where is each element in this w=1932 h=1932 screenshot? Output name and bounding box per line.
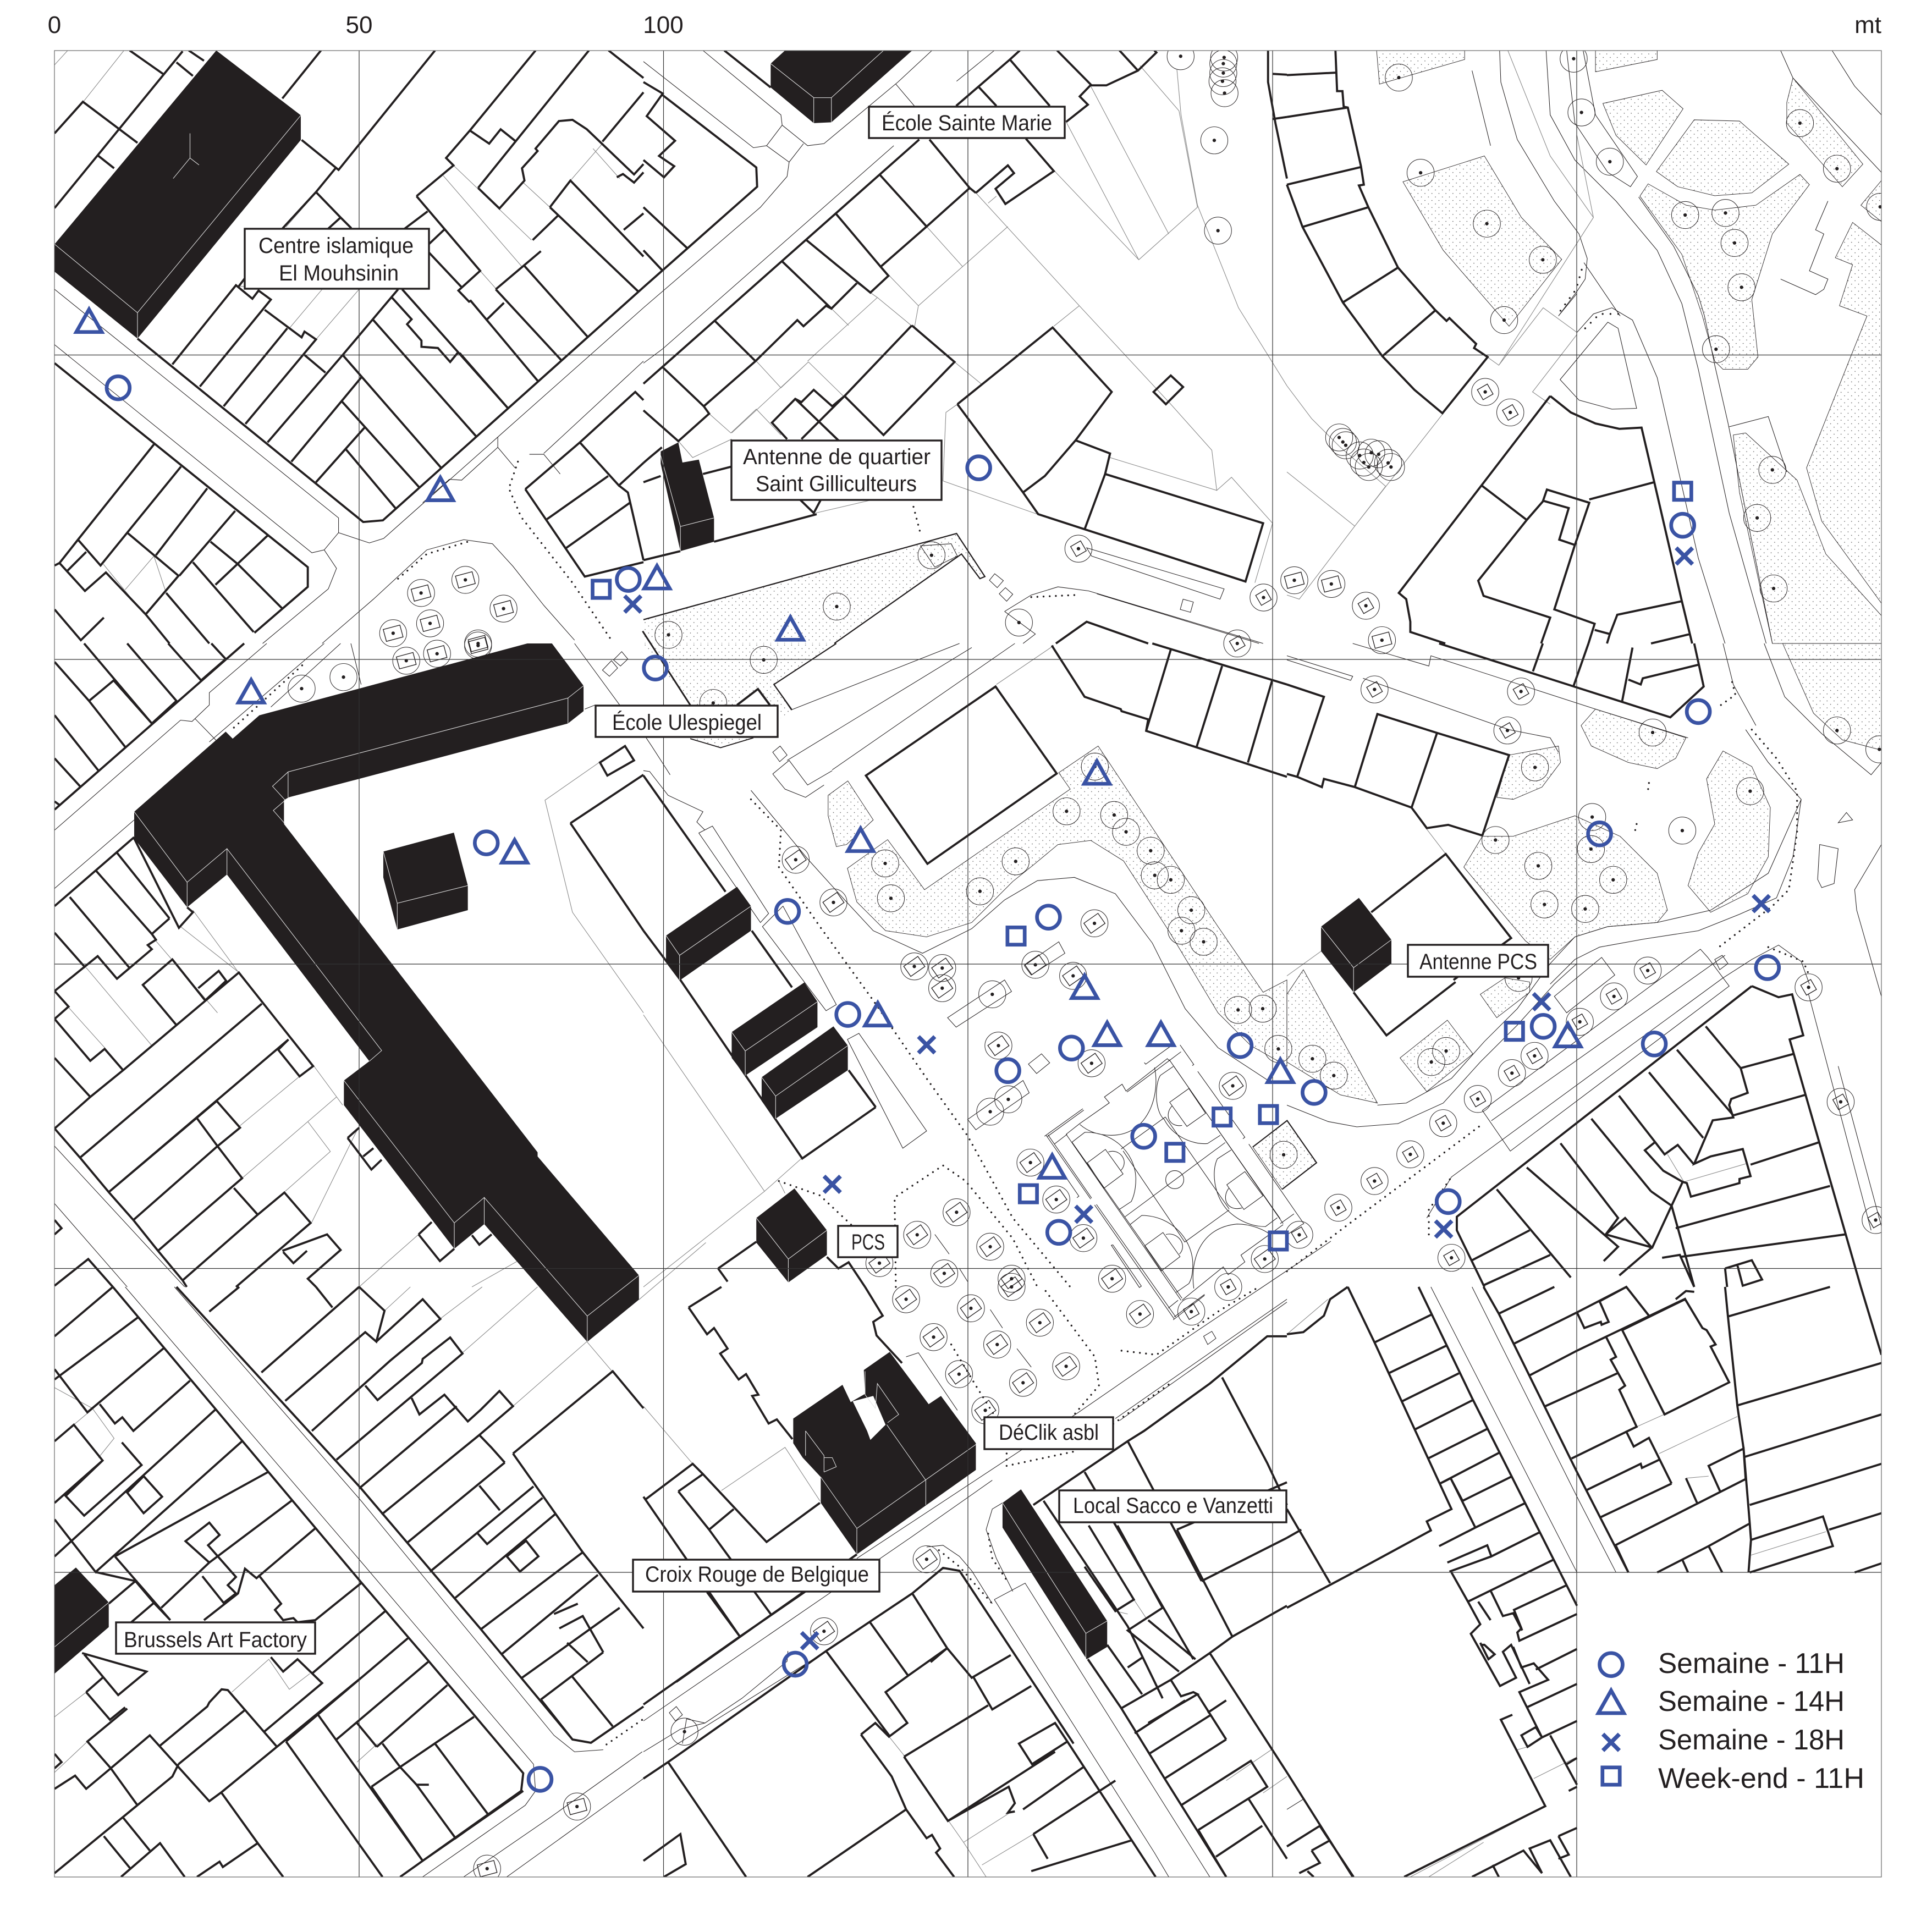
thin parcel lines: [678, 65, 1287, 583]
label: Local Sacco e Vanzetti: Local Sacco e Vanzetti: [1073, 1494, 1273, 1518]
legend text: [1658, 1648, 1864, 1795]
dotted edges: [1287, 678, 1809, 1272]
label: Local Sacco e Vanzetti: [1059, 1490, 1286, 1522]
trees: [1286, 676, 1893, 1272]
trees: [700, 646, 1297, 1292]
scale axis labels: 50: [346, 12, 372, 38]
map sector: north-west: [54, 51, 643, 657]
map sector: west: [54, 632, 706, 1342]
dotted edge: [607, 1719, 643, 1744]
label: Croix Rouge de Belgique: [633, 1560, 879, 1592]
thin lines: promenade and rectangles: [643, 643, 1272, 1281]
markers: south-west: [529, 1768, 552, 1791]
label: Brussels Art Factory: Brussels Art Factory: [124, 1628, 307, 1652]
trees: [288, 632, 492, 702]
court walls: [1044, 1045, 1304, 1320]
thin parcel lines: [643, 646, 1054, 1287]
label: Antenne de quartier Saint Gilliculteurs: Antenne de quartier: [743, 445, 931, 469]
building outlines: [54, 1287, 643, 1877]
roof line: [54, 1603, 109, 1647]
label: DéClik asbl: DéClik asbl: [999, 1421, 1099, 1445]
thin lines: [643, 1241, 1331, 1877]
markers: east: [1302, 700, 1779, 1237]
thin parcel lines: [1287, 1299, 1826, 1877]
thin parcel lines: [54, 1287, 643, 1773]
scale axis labels: [48, 12, 1881, 38]
thin road curves: [1287, 643, 1881, 1230]
scale axis labels: 100: [643, 12, 684, 38]
legend symbols: [1598, 1653, 1624, 1785]
markers: south-centre: [784, 1632, 818, 1676]
label: École Sainte Marie: École Sainte Marie: [882, 111, 1052, 135]
label: Antenne de quartier Saint Gilliculteurs: Saint Gilliculteurs: [756, 472, 917, 496]
trees: [474, 1793, 591, 1883]
building outlines: [643, 51, 1287, 643]
black L-shaped building: École Ulespiegel: [134, 643, 639, 1342]
thin parcel lines: [54, 51, 620, 614]
black buildings: école Sainte Marie side and antenne: [660, 51, 912, 551]
label: Antenne PCS: Antenne PCS: [1419, 950, 1537, 974]
court lines: [1121, 1117, 1229, 1242]
roof lines: [1321, 927, 1391, 992]
legend text: Semaine - 18H: [1658, 1724, 1845, 1756]
dotted edges: [234, 664, 304, 728]
scale axis labels: 0: [48, 12, 61, 38]
stippled planters: [1287, 643, 1881, 1103]
label: Antenne PCS: [1408, 945, 1548, 977]
north planter continuation: [643, 643, 836, 747]
courtyard notch: [853, 1396, 885, 1440]
map sector: south-west: [54, 1287, 643, 1883]
label: PCS: [838, 1226, 898, 1257]
label: PCS: PCS: [851, 1230, 885, 1254]
label: Croix Rouge de Belgique: Croix Rouge de Belgique: [645, 1562, 869, 1587]
map sector: north-east: [1281, 45, 1894, 654]
central sports court: [1044, 1045, 1317, 1320]
buildings outlines: [1287, 51, 1692, 643]
label: École Ulespiegel: [596, 706, 778, 737]
dotted edges: [939, 1287, 1259, 1604]
map sector: centre park: [643, 631, 1317, 1292]
thin parcel lines: [1287, 828, 1746, 1182]
thin lines: [1287, 1287, 1616, 1809]
planter outline: [643, 533, 985, 643]
building outlines: [643, 643, 1287, 1287]
roof lines: [666, 906, 848, 1283]
black building: Brussels Art Factory: [54, 1567, 109, 1674]
legend: [1598, 1648, 1864, 1795]
scale axis labels: mt: [1854, 12, 1881, 38]
arc below label: [690, 738, 753, 748]
thin street curves: [1472, 51, 1881, 643]
markers: west: [239, 680, 527, 862]
legend text: Semaine - 14H: [1658, 1686, 1845, 1718]
dotted edges: [913, 507, 1075, 597]
building outlines: [54, 643, 643, 1287]
stippled planters: [828, 746, 1317, 1189]
park ground and thin lines: [54, 289, 643, 643]
trees: [671, 1273, 1242, 1745]
trees: [655, 43, 1277, 657]
thin lines: [54, 643, 628, 1287]
map sector: south-centre: [643, 1241, 1331, 1877]
markers: north-east: [1671, 483, 1694, 564]
label: Centre islamique El Mouhsinin: [245, 229, 429, 289]
thin parcel lines: [643, 1406, 1287, 1877]
black building: Antenne PCS: [1321, 898, 1391, 992]
label: Centre islamique El Mouhsinin: El Mouhsinin: [279, 261, 399, 285]
map sector: north-centre: [643, 43, 1287, 657]
observation markers: [76, 310, 1779, 1791]
black building: Centre islamique: [54, 51, 301, 339]
stippled planters: [1377, 51, 1881, 643]
markers: north-centre: [644, 456, 990, 640]
planter double edge: [1253, 1120, 1317, 1189]
roof lines: [660, 51, 884, 551]
dotted promenade lines: [751, 800, 1070, 1287]
legend text: Week-end - 11H: [1658, 1763, 1864, 1795]
markers: north-west: [76, 310, 641, 612]
building block outlines: [54, 51, 643, 643]
building roof lines: [54, 115, 301, 339]
black cube building: [383, 833, 468, 929]
court kiosks: [1087, 1088, 1263, 1271]
north planter edges: [643, 631, 690, 705]
roof lines: [134, 686, 639, 1342]
dotted park edges: [398, 461, 612, 640]
map sector: east: [1286, 643, 1893, 1287]
black buildings: [666, 887, 848, 1283]
dotted edges: [1560, 265, 1621, 328]
trees: [1281, 45, 1894, 654]
north planter inner rectangle: [774, 643, 836, 710]
court centre circle: [1166, 1171, 1184, 1188]
court arcs: [1072, 1066, 1277, 1292]
building outlines: [1287, 1287, 1881, 1877]
thin street lines: [643, 51, 1263, 643]
label: École Ulespiegel: École Ulespiegel: [612, 710, 762, 735]
thin parcel lines: [69, 762, 706, 1300]
stippled planter: [643, 533, 985, 643]
trees: [379, 566, 517, 657]
north planter building corner: [737, 689, 770, 705]
label: Centre islamique El Mouhsinin: Centre islamique: [258, 234, 414, 258]
thin street lines: [125, 1287, 643, 1877]
black buildings: Croix Rouge and Local Sacco e Vanzetti: [793, 1352, 1107, 1659]
roof lines: [806, 1371, 1107, 1659]
map sector: south-east: [1287, 1287, 1881, 1877]
building outlines: [1287, 643, 1861, 1287]
label: DéClik asbl: [984, 1417, 1113, 1449]
thin parcel lines: [1287, 51, 1593, 599]
markers: centre park: [644, 657, 1293, 1250]
legend text: Semaine - 11H: [1658, 1648, 1845, 1680]
building outlines: [643, 1287, 1287, 1877]
label: Antenne de quartier Saint Gilliculteurs: [731, 441, 942, 500]
